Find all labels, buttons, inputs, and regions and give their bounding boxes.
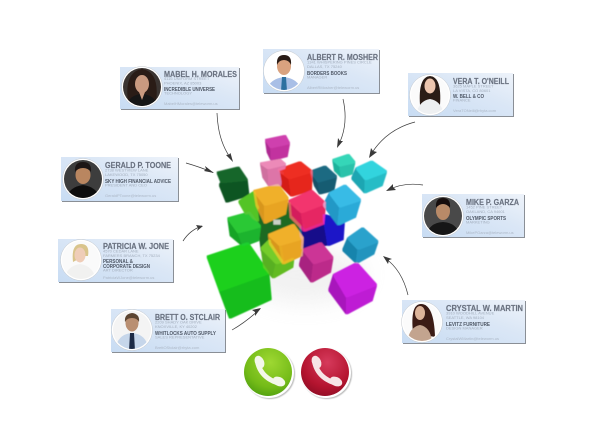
arrow: Vera to cubes xyxy=(369,122,415,158)
cube: cyan xyxy=(352,162,386,192)
contact text: Gerald: GeraldPToone@teleworm.us xyxy=(105,193,156,198)
cube: purple xyxy=(329,263,376,313)
cube: bright green mid xyxy=(228,213,260,246)
card: Mike P. Garza xyxy=(422,194,525,238)
contact text: Albert: MANAGER xyxy=(307,74,327,80)
contact text: Albert: AlbertRMosher@teleworm.us xyxy=(307,85,359,90)
contact text: Crystal: CRYSTAL W. MARTIN xyxy=(446,304,523,313)
contact text: Brett: KNOXVILLE, KY 40202 xyxy=(155,324,198,329)
avatar: Mabel xyxy=(122,66,162,108)
contact text: Gerald: GERALD P. TOONE xyxy=(105,161,172,170)
contact text: Mabel: INCREDIBLE UNIVERSE xyxy=(164,87,215,93)
button: decline call xyxy=(301,348,352,399)
cube: dark teal xyxy=(311,167,336,193)
avatar: Mike xyxy=(422,196,464,237)
contact text: Patricia: PERSONAL & xyxy=(103,259,133,265)
contact text: Brett: 2209 SHADY OAK DRIVE xyxy=(155,320,202,324)
cube: dark green xyxy=(218,168,248,202)
contact text: Mike: MikePGarza@teleworm.us xyxy=(466,230,514,235)
cube: small teal xyxy=(333,155,354,177)
cube: speck xyxy=(274,221,280,224)
contact text: Patricia: FARMERS BRANCH, TX 75234 xyxy=(103,253,161,258)
arrow: Crystal to cubes xyxy=(383,256,408,295)
contact text: Albert: BORDERS BOOKS xyxy=(307,71,347,77)
contact text: Gerald: SKY HIGH FINANCIAL ADVICE xyxy=(105,179,171,185)
card: Brett O. Stclair xyxy=(111,309,226,353)
contact text: Patricia: 4570 CEDAR LANE xyxy=(103,248,139,254)
arrow: Brett to cubes xyxy=(232,308,261,330)
avatar: Gerald xyxy=(62,158,104,200)
avatar: Albert xyxy=(264,50,304,92)
contact text: Crystal: DESIGN MANAGER xyxy=(446,326,483,330)
avatar: Vera xyxy=(410,74,450,116)
cube: big green xyxy=(208,243,271,318)
contact text: Patricia: PatriciaWJone@teleworm.us xyxy=(103,275,154,280)
avatar: Brett xyxy=(112,310,152,351)
contact text: Albert: 1341 WHISPERING PINES CIRCLE xyxy=(307,60,372,64)
card: Gerald P. Toone xyxy=(61,157,179,202)
contact text: Crystal: CrystalWMartin@teleworm.us xyxy=(446,336,499,341)
contact text: Patricia xyxy=(103,242,170,280)
contact text: Mike xyxy=(466,198,519,235)
contact text: Brett: SALES REPRESENTATIVE xyxy=(155,334,205,340)
contact text: Patricia: ART DIRECTOR xyxy=(103,268,133,272)
contact text: Gerald: LAKEWOOD, TX 75050 xyxy=(105,172,148,177)
contact text: Crystal: LEVITZ FURNITURE xyxy=(446,322,490,328)
cube: teal blue xyxy=(343,228,377,263)
card: Albert R. Mosher xyxy=(263,49,380,94)
contact text: Mike: MARKETING xyxy=(466,220,490,224)
contact text: Patricia: PATRICIA W. JONE xyxy=(103,242,170,251)
soft cube shadow xyxy=(245,247,365,303)
contact text: Vera: VeraTONeill@rhyta.com xyxy=(453,108,497,113)
button: accept call xyxy=(244,348,295,399)
contact text: Brett: BrettOStclair@rhyta.com xyxy=(155,345,200,350)
contact text: Albert: DALLAS, TX 75240 xyxy=(307,64,343,69)
cube: pink-red xyxy=(289,191,325,231)
contact text: Mabel: MabelHMorales@teleworm.us xyxy=(164,101,218,106)
contact text: Mike: OAKLAND, CA 94601 xyxy=(466,209,506,214)
contact text: Brett: BRETT O. STCLAIR xyxy=(155,313,220,322)
contact text: Crystal: 3910 WOODHILL AVENUE xyxy=(446,310,495,316)
card: Vera T. O'Neill xyxy=(408,73,514,117)
contact text: Brett: WHITLOCKS AUTO SUPPLY xyxy=(155,331,216,337)
contact text: Vera: 3625 MAPLE STREET xyxy=(453,84,494,88)
cube: back lime xyxy=(239,192,265,222)
contact text: Vera: W. BELL & CO xyxy=(453,94,484,100)
contact text: Gerald xyxy=(105,161,172,198)
cube: inner dark center xyxy=(257,202,303,250)
contact text: Mabel xyxy=(164,70,238,106)
contact text: Mabel: 4116 UNIFORM STREET xyxy=(164,76,210,81)
arrow: Gerald to cubes xyxy=(186,163,214,173)
contact text: Mike: OLYMPIC SPORTS xyxy=(466,216,506,222)
arrow: Mike to cubes xyxy=(386,184,423,191)
contact text: Vera: FINANCE xyxy=(453,98,471,102)
contact text: Crystal xyxy=(446,304,523,341)
contact text: Albert: ALBERT R. MOSHER xyxy=(307,53,378,62)
cube: blue xyxy=(323,215,344,245)
cube: orange upper xyxy=(254,185,288,223)
contact text: Vera: LA VISTA, CO 80601 xyxy=(453,88,491,93)
contact text: Brett xyxy=(155,313,220,350)
arrow: Patricia to cubes xyxy=(183,225,203,241)
contact text: Vera xyxy=(453,77,509,113)
card: Mabel H. Morales xyxy=(120,66,240,110)
contact text: Gerald: PRESIDENT AND CEO xyxy=(105,182,147,188)
contact text: Mike: 1452 PINE STREET xyxy=(466,204,503,210)
contact text: Vera: VERA T. O'NEILL xyxy=(453,77,509,86)
icon: phone handset xyxy=(253,354,287,388)
contact text: Patricia: CORPORATE DESIGN xyxy=(103,264,150,270)
contact text: Mabel: MABEL H. MORALES xyxy=(164,70,238,79)
cube: pink xyxy=(261,160,285,185)
contact text: Albert xyxy=(307,53,378,90)
contact text: Gerald: 2738 WESTVIEW LANE xyxy=(105,168,149,172)
arrow: Mabel to cubes xyxy=(217,113,233,162)
contact text: Mabel: TECHNOLOGY xyxy=(164,90,192,96)
cube: navy xyxy=(300,220,328,248)
cube: orange lower xyxy=(269,225,303,263)
cube: sky blue xyxy=(324,186,360,224)
arrow: Albert to cubes xyxy=(337,99,345,148)
cube cluster xyxy=(208,136,386,318)
card: Patricia W. Jone xyxy=(58,239,174,283)
avatar: Crystal xyxy=(402,302,442,343)
cube: magenta low xyxy=(300,243,332,282)
card: Crystal W. Martin xyxy=(402,300,526,344)
avatar: Patricia xyxy=(60,240,102,281)
contact text: Crystal: SEATTLE, WA 98104 xyxy=(446,315,485,320)
icon: phone handset xyxy=(310,354,344,388)
contact text: Mabel: PHOENIX, AZ 85003 xyxy=(164,80,202,86)
contact text: Mike: MIKE P. GARZA xyxy=(466,198,519,207)
cube: lime lower xyxy=(262,238,297,277)
cube: red xyxy=(278,162,312,196)
cube: small magenta xyxy=(266,136,289,160)
